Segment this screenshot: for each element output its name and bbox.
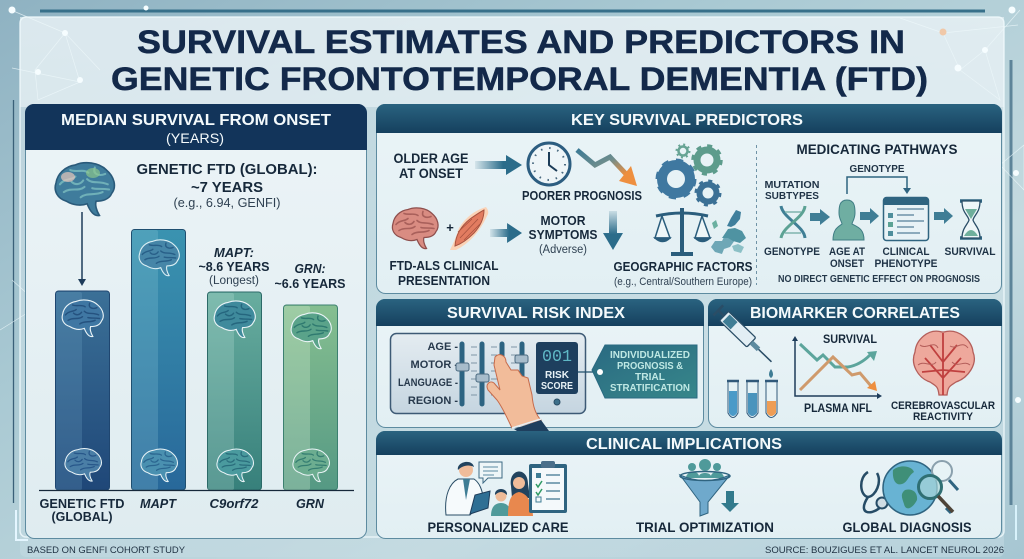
panel header: key predictors: KEY SURVIVAL PREDICTORS: [571, 112, 803, 129]
callout: individualized prognosis: TRIAL: [635, 371, 666, 383]
title: GENETIC FRONTOTEMPORAL DEMENTIA (FTD): [111, 61, 928, 97]
icon: balance scale: [655, 208, 710, 254]
arrow: brain to global bar: [78, 212, 86, 286]
doctor: [446, 462, 490, 515]
icon: europe map: [711, 210, 746, 254]
footer: cohort note: BASED ON GENFI COHORT STUDY: [27, 545, 186, 556]
arrow: prognosis decline: [577, 150, 637, 186]
text: cerebrovascular reactivity: [891, 400, 995, 423]
axis labels: GRN: [296, 497, 325, 511]
icon: global brain: [55, 163, 114, 216]
icon: hourglass: [960, 201, 982, 238]
axis labels: C9orf72: [210, 497, 259, 511]
panel header: median survival: (YEARS): [166, 130, 224, 146]
text: motor symptoms: [528, 213, 598, 256]
callout: global estimate: ~7 YEARS: [191, 180, 263, 196]
callout: GRN value: [274, 261, 346, 291]
panel: key survival predictors: [376, 104, 1002, 294]
panel header: risk index: SURVIVAL RISK INDEX: [447, 305, 626, 322]
icon: hand: [487, 355, 549, 431]
risk score display: 001: [542, 348, 572, 367]
text: poorer prognosis: POORER PROGNOSIS: [522, 189, 642, 203]
text: pathway labels: CLINICAL: [882, 246, 930, 258]
text: clinical labels: [428, 520, 972, 535]
panel header: risk index: [376, 299, 704, 326]
slider labels: AGE -: [427, 341, 458, 353]
title: SURVIVAL ESTIMATES AND PREDICTORS IN: [137, 24, 905, 60]
text: pathway labels: AGE AT: [829, 246, 865, 258]
callout: individualized prognosis: INDIVIDUALIZED: [610, 349, 690, 361]
text: motor symptoms: MOTOR: [540, 213, 586, 228]
arrow: bracket: [847, 177, 911, 194]
arrow: genotype to age: [810, 209, 830, 225]
arrow: down to geographic: [603, 211, 623, 250]
callout: individualized prognosis: PROGNOSIS &: [617, 360, 683, 372]
icon: pink brain: [392, 208, 438, 249]
panel header: median survival: [25, 104, 367, 150]
panel header: median survival: MEDIAN SURVIVAL FROM ONSET: [61, 112, 331, 129]
text: clinical labels: PERSONALIZED CARE: [428, 520, 568, 535]
arrow: FTD-ALS to motor: [490, 223, 522, 243]
child: [491, 489, 511, 516]
text: geographic factors: GEOGRAPHIC FACTORS: [614, 259, 753, 274]
risk score display: SCORE: [541, 380, 573, 392]
text: pathway labels: SURVIVAL: [944, 246, 996, 258]
slider labels: REGION -: [408, 395, 458, 407]
text: pathway labels: [764, 246, 996, 270]
panel header: biomarkers: BIOMARKER CORRELATES: [750, 305, 960, 322]
axis labels: (GLOBAL): [52, 510, 112, 524]
callout: MAPT value: MAPT:: [214, 245, 254, 260]
text: plus: +: [446, 220, 454, 235]
icon: clinical card: [884, 198, 928, 240]
panel: median survival from onset: [25, 104, 367, 538]
callout: individualized prognosis: STRATIFICATION: [610, 382, 690, 394]
text: cerebrovascular reactivity: CEREBROVASCULAR: [891, 400, 995, 412]
callout: global estimate: (e.g., 6.94, GENFI): [174, 196, 280, 210]
callout: GRN value: ~6.6 YEARS: [274, 276, 346, 291]
slider labels: MOTOR -: [411, 359, 458, 371]
axis labels: MAPT: [140, 497, 177, 511]
text: survival label: SURVIVAL: [823, 334, 877, 346]
bar: MAPT: [132, 230, 186, 490]
slider labels: [398, 341, 458, 407]
bar: GRN: [284, 305, 338, 490]
callout: GRN value: GRN:: [294, 261, 326, 276]
arrow: age to clock: [475, 155, 522, 175]
text: geographic factors: (e.g., Central/Southern Europe): [614, 276, 752, 288]
axis labels: [40, 497, 325, 524]
panel header: key predictors: [376, 104, 1002, 133]
panel header: implications: CLINICAL IMPLICATIONS: [586, 436, 782, 453]
text: clinical labels: TRIAL OPTIMIZATION: [636, 520, 774, 535]
callout: global estimate: GENETIC FTD (GLOBAL):: [136, 162, 318, 178]
panel: survival risk index: [376, 299, 704, 431]
text: older age at onset: AT ONSET: [399, 166, 464, 181]
text: genotype bracket label: GENOTYPE: [850, 163, 904, 175]
heading: medicating pathways: MEDICATING PATHWAYS: [796, 142, 958, 157]
icon: syringe: [713, 305, 776, 367]
risk score display: [536, 342, 578, 394]
clipboard: [529, 461, 567, 513]
text: no direct genetic effect: NO DIRECT GENETIC EFFECT ON PROGNOSIS: [778, 274, 980, 285]
text: pathway labels: ONSET: [830, 258, 864, 270]
text: pathway labels: GENOTYPE: [764, 246, 820, 258]
text: older age at onset: [394, 151, 468, 181]
icon: gears: [658, 144, 721, 205]
speech bubble: [479, 462, 502, 483]
text: motor symptoms: (Adverse): [539, 244, 587, 256]
text: FTD-ALS clinical presentation: [390, 258, 499, 288]
callout: individualized prognosis: [592, 345, 697, 398]
text: mutation subtypes: [764, 179, 820, 202]
bar: genetic FTD global: [56, 291, 110, 490]
text: mutation subtypes: MUTATION: [764, 179, 820, 191]
title: [111, 24, 928, 97]
slider labels: LANGUAGE -: [398, 377, 458, 389]
panel header: implications: [376, 431, 1002, 455]
bar chart: median survival: [39, 230, 354, 490]
icon: person: [833, 200, 864, 240]
arrow: phenotype to survival: [934, 208, 953, 224]
text: mutation subtypes: SUBTYPES: [765, 190, 819, 202]
icon: clock: [528, 143, 570, 185]
line chart: survival vs plasma NfL: [792, 336, 882, 399]
parent: [508, 471, 533, 516]
footer: source: SOURCE: BOUZIGUES ET AL. LANCET NEUROL 2026: [765, 545, 1004, 556]
panel: biomarker correlates: [708, 299, 1002, 428]
callout: MAPT value: (Longest): [209, 275, 259, 287]
icon: test tubes: [727, 369, 778, 418]
text: older age at onset: OLDER AGE: [394, 151, 468, 166]
callout: MAPT value: [198, 245, 270, 287]
callout: global estimate: [136, 162, 318, 210]
icon: muscle: [450, 207, 488, 250]
text: geographic factors: [614, 259, 753, 288]
axis labels: GENETIC FTD: [40, 497, 124, 511]
icon: global diagnosis: [861, 461, 958, 515]
text: pathway labels: PHENOTYPE: [874, 258, 938, 270]
panel: clinical implications: [376, 431, 1002, 538]
subpanel: mediating pathways: [764, 142, 996, 285]
risk score display: RISK: [545, 369, 569, 381]
text: motor symptoms: SYMPTOMS: [528, 227, 598, 242]
slider device: [390, 334, 586, 414]
arrow: age to phenotype: [860, 208, 879, 224]
text: FTD-ALS clinical presentation: FTD-ALS CLINICAL: [390, 258, 499, 273]
text: FTD-ALS clinical presentation: PRESENTATION: [398, 273, 490, 288]
callout: MAPT value: ~8.6 YEARS: [198, 259, 270, 274]
icon: funnel: [680, 459, 739, 516]
text: clinical labels: GLOBAL DIAGNOSIS: [842, 520, 972, 535]
icon: doctor and family: [446, 461, 567, 516]
icon: vascular brain: [913, 331, 974, 395]
text: plasma NfL label: PLASMA NFL: [804, 403, 872, 415]
icon: DNA: [781, 206, 805, 238]
text: cerebrovascular reactivity: REACTIVITY: [913, 411, 974, 423]
panel header: biomarkers: [708, 299, 1002, 326]
bar: C9orf72: [208, 292, 262, 490]
